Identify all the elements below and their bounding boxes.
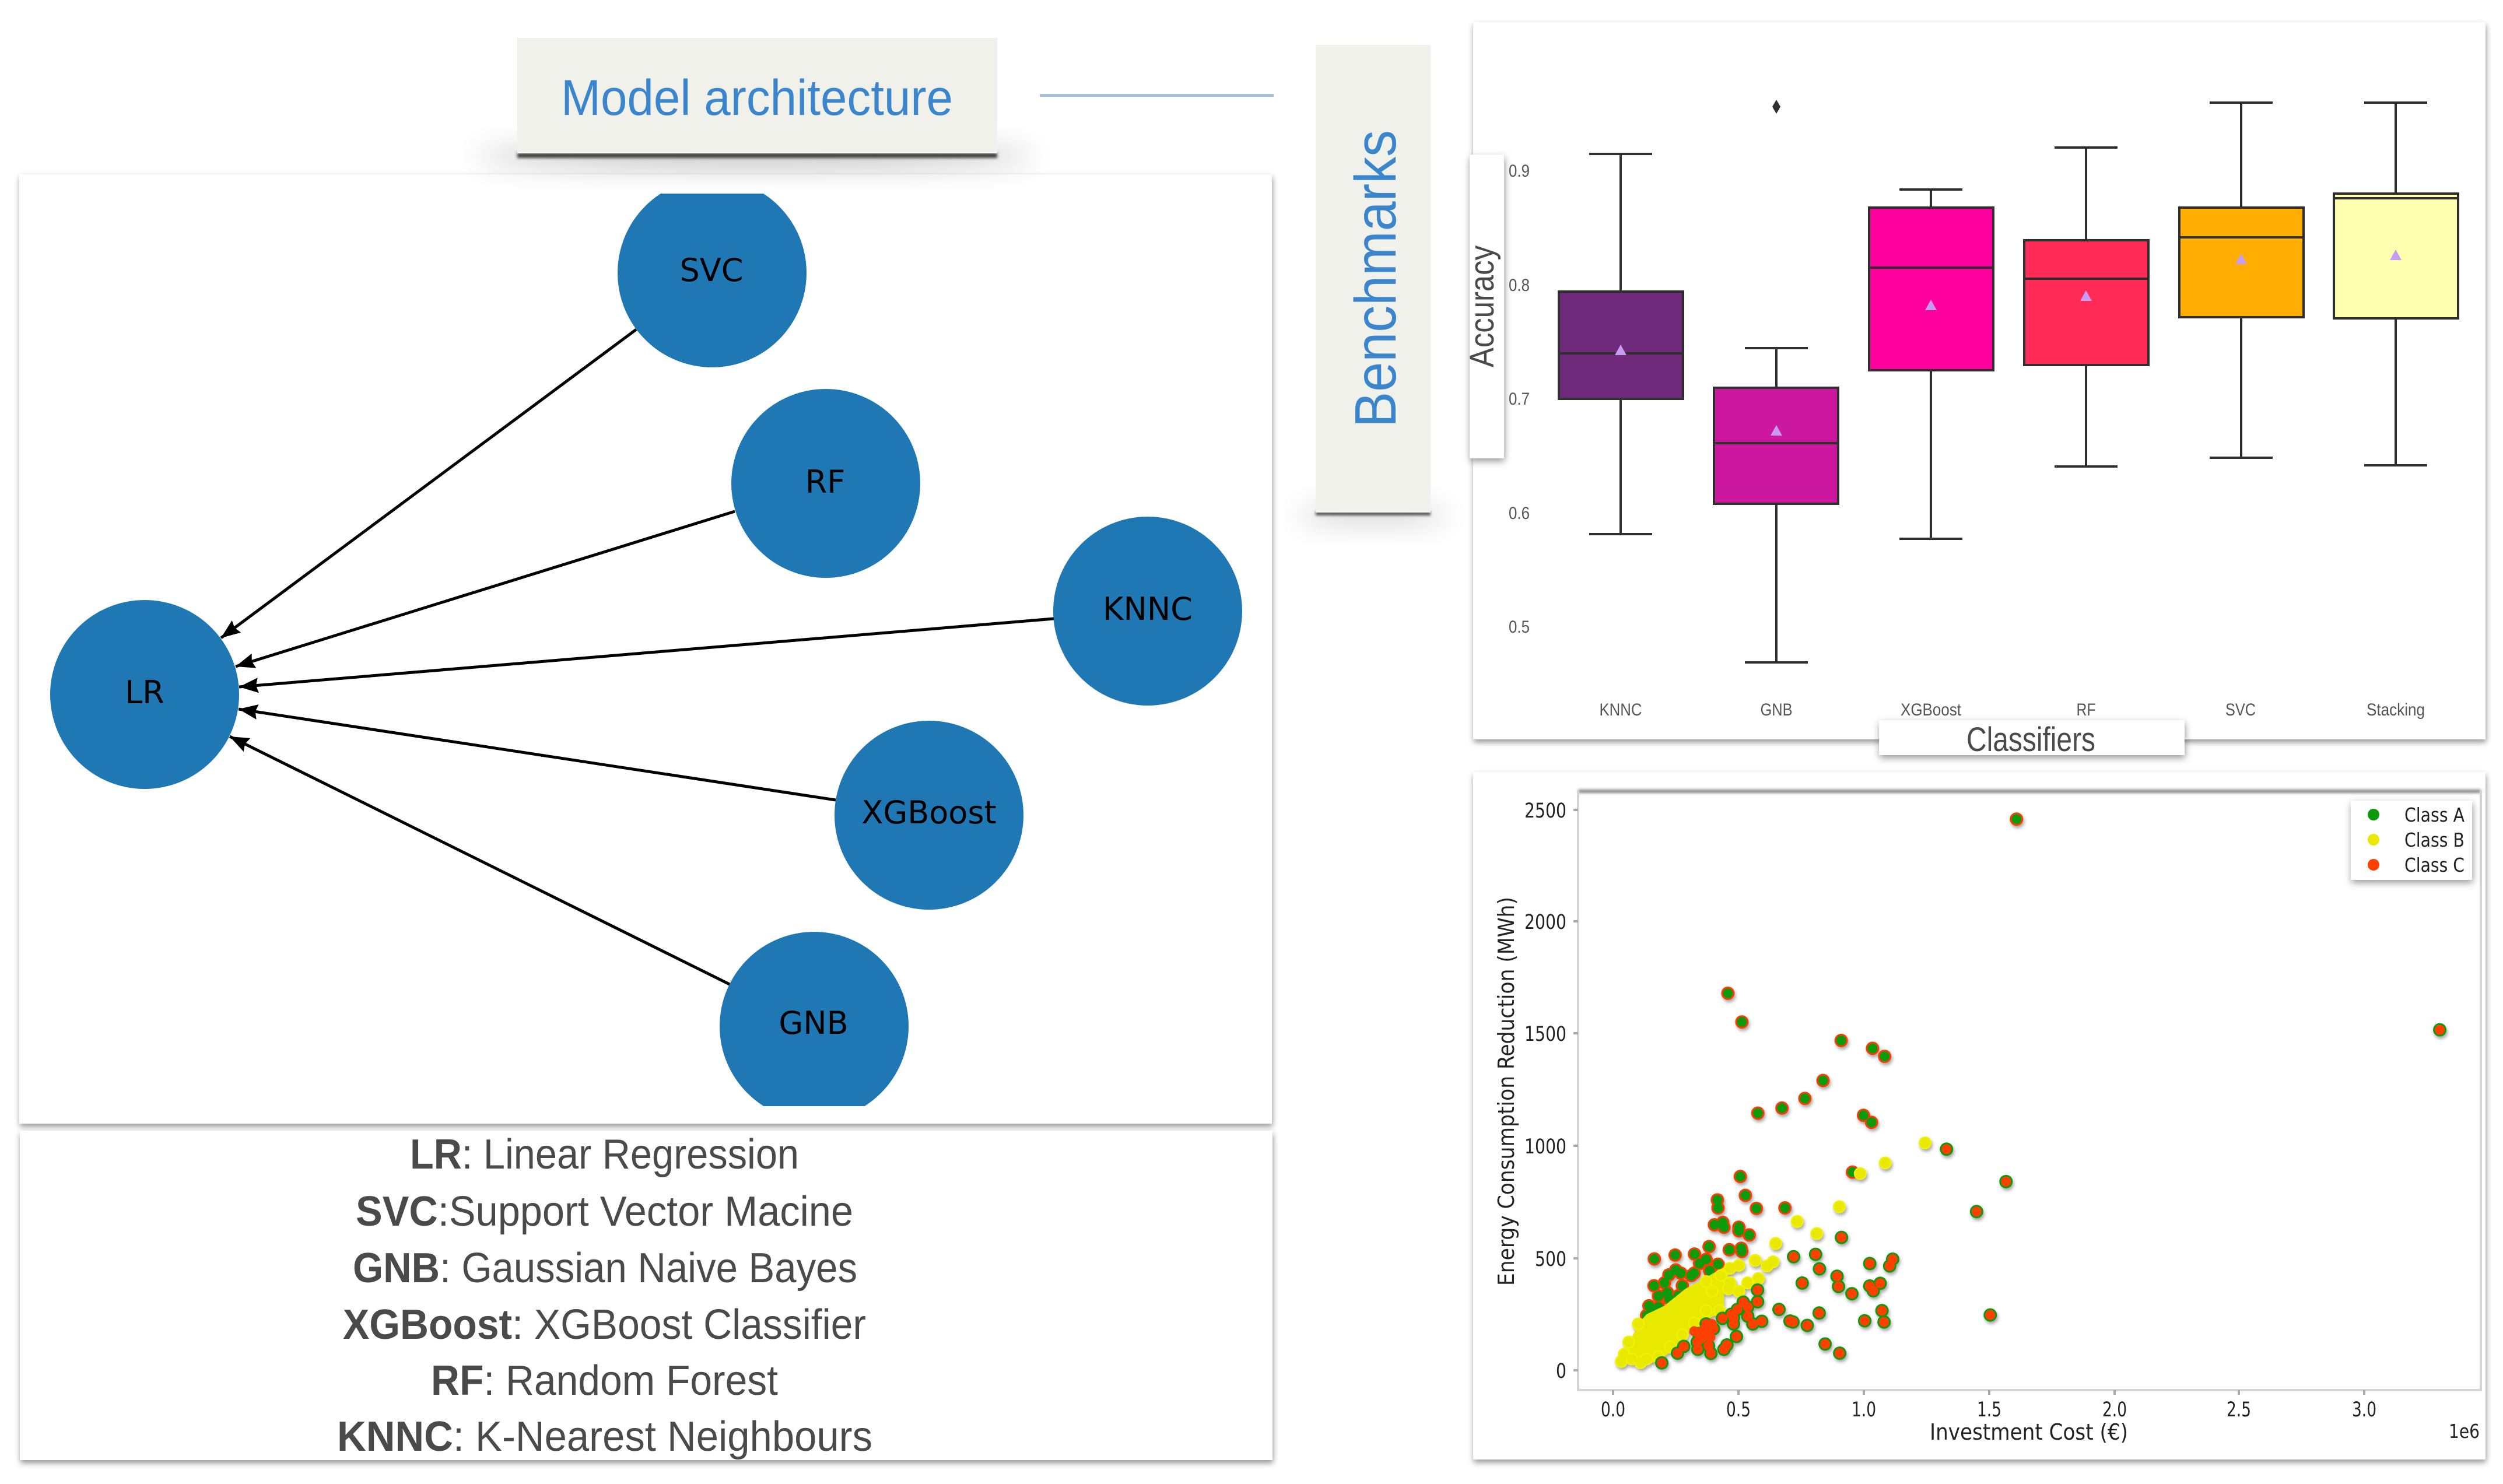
x axis category labels: GNB: [1760, 700, 1793, 720]
box: GNB: [1714, 100, 1838, 662]
text: KNNC: KNNC: K-Nearest Neighbours: [337, 1413, 872, 1460]
node: XGBoost: [835, 721, 1023, 910]
box: KNNC: [1559, 154, 1683, 534]
scatter y tick labels: 2000: [1524, 911, 1566, 934]
scatter y tick labels: 0: [1556, 1360, 1566, 1383]
y axis tick labels: 0.8: [1509, 276, 1530, 295]
arrow: XGBoost to LR: [239, 709, 836, 800]
x axis category labels: SVC: [2225, 700, 2256, 720]
scatter x tick labels: 3.0: [2352, 1398, 2376, 1422]
panel: model architecture network: [19, 174, 1272, 1124]
scatter y tick labels: 500: [1535, 1248, 1566, 1271]
scatter x tick labels: 0.0: [1601, 1398, 1625, 1422]
node: RF: RF: [805, 464, 845, 500]
label: Accuracy: Accuracy: [1463, 245, 1501, 367]
panel: benchmarks heading: [1297, 45, 1449, 520]
text: GNB: GNB: Gaussian Naive Bayes: [353, 1245, 857, 1292]
offset label: 1e6: [2449, 1420, 2480, 1443]
panel: scatter plot: [1473, 772, 2486, 1460]
label: Accuracy: [1463, 155, 1504, 458]
node: KNNC: [1053, 517, 1242, 706]
scatter points: [1617, 819, 2439, 1365]
label: Classifiers: Classifiers: [1966, 721, 2095, 759]
class A points: [1646, 819, 2017, 1315]
arrow: GNB to LR: [230, 736, 730, 984]
label: Classifiers: [1879, 720, 2185, 759]
plot axes: [1573, 790, 2481, 1395]
class C points: [1661, 1030, 2439, 1363]
x axis category labels: XGBoost: [1901, 700, 1962, 720]
scatter x tick labels: 2.0: [2102, 1398, 2127, 1422]
panel: accuracy box plot: [1463, 22, 2486, 759]
node: SVC: SVC: [680, 252, 743, 289]
arrow: SVC to LR: [221, 329, 636, 638]
node: LR: [50, 600, 239, 789]
connector line: [1040, 94, 1274, 97]
y axis title: Energy Consumption Reduction (MWh): [1494, 897, 1519, 1286]
y axis tick labels: [1509, 162, 1530, 637]
chart legend: Class C: [2404, 854, 2465, 876]
x axis category labels: [1599, 700, 2425, 720]
panel: benchmarks heading: Benchmarks: [1343, 130, 1408, 427]
y axis tick labels: 0.7: [1509, 390, 1530, 409]
scatter x tick labels: 1.5: [1977, 1398, 2001, 1422]
x axis category labels: Stacking: [2367, 700, 2425, 720]
heading: Model architecture: [475, 38, 1035, 163]
node: LR: LR: [125, 674, 164, 711]
node: RF: [731, 389, 920, 578]
box: Stacking: [2334, 103, 2458, 465]
chart legend: Class A: [2404, 804, 2465, 826]
box: RF: [2024, 148, 2148, 466]
chart legend: [2351, 801, 2472, 880]
text: LR: LR: Linear Regression: [410, 1131, 799, 1178]
scatter y tick labels: 1500: [1524, 1023, 1566, 1046]
node: SVC: [618, 178, 807, 367]
y axis tick labels: 0.9: [1509, 162, 1530, 181]
text: RF: RF: Random Forest: [431, 1357, 778, 1404]
x axis category labels: KNNC: [1599, 700, 1642, 720]
y axis tick labels: 0.5: [1509, 618, 1530, 637]
scatter x tick labels: [1601, 1398, 2376, 1422]
x axis category labels: RF: [2076, 700, 2096, 720]
chart legend: Class B: [2404, 829, 2465, 851]
scatter x tick labels: 1.0: [1852, 1398, 1876, 1422]
panel: legend of abbreviations: [20, 1131, 1272, 1460]
scatter x tick labels: 0.5: [1726, 1398, 1751, 1422]
text: SVC: SVC:Support Vector Macine: [356, 1188, 853, 1235]
network graph: [50, 178, 1242, 1121]
arrow: KNNC to LR: [239, 619, 1054, 687]
node: KNNC: KNNC: [1103, 591, 1193, 627]
x axis title: Investment Cost (€): [1930, 1419, 2128, 1445]
scatter x tick labels: 2.5: [2227, 1398, 2251, 1422]
node: XGBoost: XGBoost: [861, 794, 997, 831]
node: GNB: GNB: [779, 1005, 849, 1041]
y axis tick labels: 0.6: [1509, 504, 1530, 523]
class B points: [1617, 1143, 1925, 1365]
text: XGBoost: XGBoost: XGBoost Classifier: [343, 1301, 866, 1348]
node: GNB: [720, 932, 909, 1121]
box: SVC: [2179, 103, 2304, 458]
scatter y tick labels: 1000: [1524, 1135, 1566, 1159]
scatter y tick labels: [1524, 799, 1566, 1383]
arrow: RF to LR: [236, 511, 735, 666]
scatter y tick labels: 2500: [1524, 799, 1566, 823]
heading: Model architecture: Model architecture: [561, 70, 953, 126]
box: XGBoost: [1869, 190, 1993, 539]
